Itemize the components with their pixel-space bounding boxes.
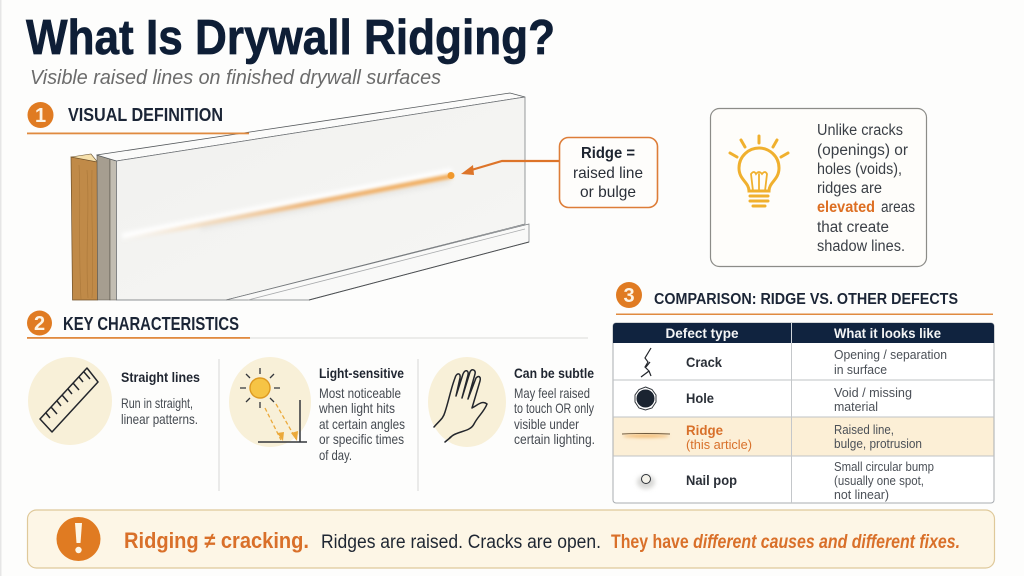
row: nail pop: (usually one spot, bbox=[834, 473, 924, 488]
badge 1 bbox=[28, 102, 54, 128]
callout: ridge definition bbox=[560, 138, 658, 208]
characteristic: straight lines: Run in straight, bbox=[121, 395, 193, 411]
characteristic: can be subtle: Can be subtle bbox=[514, 365, 594, 381]
panel: tip box: shadow lines. bbox=[817, 238, 905, 255]
icon: exclamation bbox=[56, 517, 100, 561]
row: nail pop: Nail pop bbox=[686, 472, 737, 488]
row: nail pop bbox=[637, 459, 934, 502]
badge 2: 2 bbox=[34, 313, 45, 335]
bottom callout banner: They have different causes and different fixes. bbox=[611, 532, 960, 553]
section 3 heading bbox=[616, 282, 993, 315]
characteristic: can be subtle bbox=[428, 357, 598, 447]
row: crack: Crack bbox=[686, 354, 722, 370]
characteristic: can be subtle: May feel raised bbox=[514, 385, 590, 401]
characteristic: can be subtle: certain lighting. bbox=[514, 431, 595, 447]
comparison table bbox=[613, 323, 994, 503]
table header bbox=[613, 323, 994, 343]
callout: ridge definition: Ridge = bbox=[581, 145, 635, 162]
bottom callout banner bbox=[28, 510, 994, 568]
wood stud bbox=[71, 154, 98, 300]
panel: tip box: areas bbox=[881, 199, 915, 216]
icon: hand bbox=[428, 357, 506, 447]
bottom callout banner: Ridges are raised. Cracks are open. bbox=[321, 532, 601, 553]
row: nail pop: Small circular bump bbox=[834, 459, 934, 474]
icon: sun and wall bbox=[229, 357, 311, 447]
characteristic: can be subtle: visible under bbox=[514, 416, 579, 432]
table header: What it looks like bbox=[834, 326, 941, 341]
row: hole: material bbox=[834, 399, 878, 414]
section 3 heading: COMPARISON: RIDGE VS. OTHER DEFECTS bbox=[654, 291, 958, 308]
panel: tip box: ridges are bbox=[817, 180, 882, 197]
icon: ruler bbox=[28, 357, 112, 445]
row: hole: Hole bbox=[686, 390, 714, 406]
ridge highlight bbox=[121, 171, 452, 240]
characteristic: light-sensitive: Light-sensitive bbox=[319, 365, 404, 381]
baseboard bbox=[226, 224, 529, 300]
panel: tip box: holes (voids), bbox=[817, 161, 902, 178]
section 2 heading: KEY CHARACTERISTICS bbox=[63, 313, 239, 334]
panel: tip box: Unlike cracks bbox=[817, 122, 903, 139]
badge 2 bbox=[27, 310, 52, 336]
row: ridge: bulge, protrusion bbox=[834, 436, 922, 451]
bottom callout banner: Ridging ≠ cracking. bbox=[124, 528, 309, 553]
row: crack: in surface bbox=[834, 362, 887, 377]
illustration: drywall panel with ridge bbox=[71, 93, 529, 300]
row: ridge: Raised line, bbox=[834, 422, 894, 437]
characteristic: light-sensitive: of day. bbox=[319, 447, 352, 463]
ridge marker dot bbox=[448, 172, 454, 179]
callout: ridge definition: raised line bbox=[573, 165, 643, 182]
characteristic: can be subtle: to touch OR only bbox=[514, 400, 594, 416]
characteristic: straight lines: Straight lines bbox=[121, 369, 200, 385]
title: What Is Drywall Ridging? bbox=[26, 11, 555, 65]
drywall edge bbox=[97, 155, 116, 300]
row: hole bbox=[635, 385, 912, 414]
characteristic: light-sensitive bbox=[229, 357, 409, 463]
row: ridge: (this article) bbox=[686, 438, 752, 452]
row: ridge: Ridge bbox=[686, 422, 723, 438]
arrow to ridge bbox=[461, 161, 559, 175]
badge 3: 3 bbox=[623, 285, 635, 307]
panel: tip box: that create bbox=[817, 219, 889, 236]
section 1 heading bbox=[27, 102, 249, 134]
panel top face bbox=[96, 93, 525, 161]
panel: tip box: elevated bbox=[817, 199, 875, 216]
icon: light bulb bbox=[730, 136, 788, 206]
section 1 heading: VISUAL DEFINITION bbox=[68, 104, 223, 125]
characteristic: straight lines bbox=[28, 357, 200, 445]
panel: tip box bbox=[710, 108, 926, 266]
row: hole: Void / missing bbox=[834, 385, 912, 400]
row: nail pop: not linear) bbox=[834, 487, 889, 502]
table header: Defect type bbox=[666, 326, 739, 341]
badge 3 bbox=[616, 282, 642, 308]
characteristic: light-sensitive: at certain angles bbox=[319, 416, 405, 432]
row: crack bbox=[641, 347, 947, 377]
callout: ridge definition: or bulge bbox=[580, 184, 636, 201]
panel: tip box: (openings) or bbox=[817, 142, 908, 159]
section 2 heading bbox=[27, 310, 588, 339]
highlighted ridge row background bbox=[614, 417, 994, 456]
row: ridge bbox=[622, 422, 922, 452]
subtitle: Visible raised lines on finished drywall surfaces bbox=[30, 67, 441, 89]
row: crack: Opening / separation bbox=[834, 347, 947, 362]
badge 1: 1 bbox=[35, 105, 46, 127]
characteristic: light-sensitive: Most noticeable bbox=[319, 385, 401, 401]
characteristic: light-sensitive: when light hits bbox=[318, 400, 395, 416]
panel front face bbox=[116, 97, 525, 300]
characteristic: straight lines: linear patterns. bbox=[121, 411, 198, 427]
characteristic: light-sensitive: or specific times bbox=[319, 431, 404, 447]
